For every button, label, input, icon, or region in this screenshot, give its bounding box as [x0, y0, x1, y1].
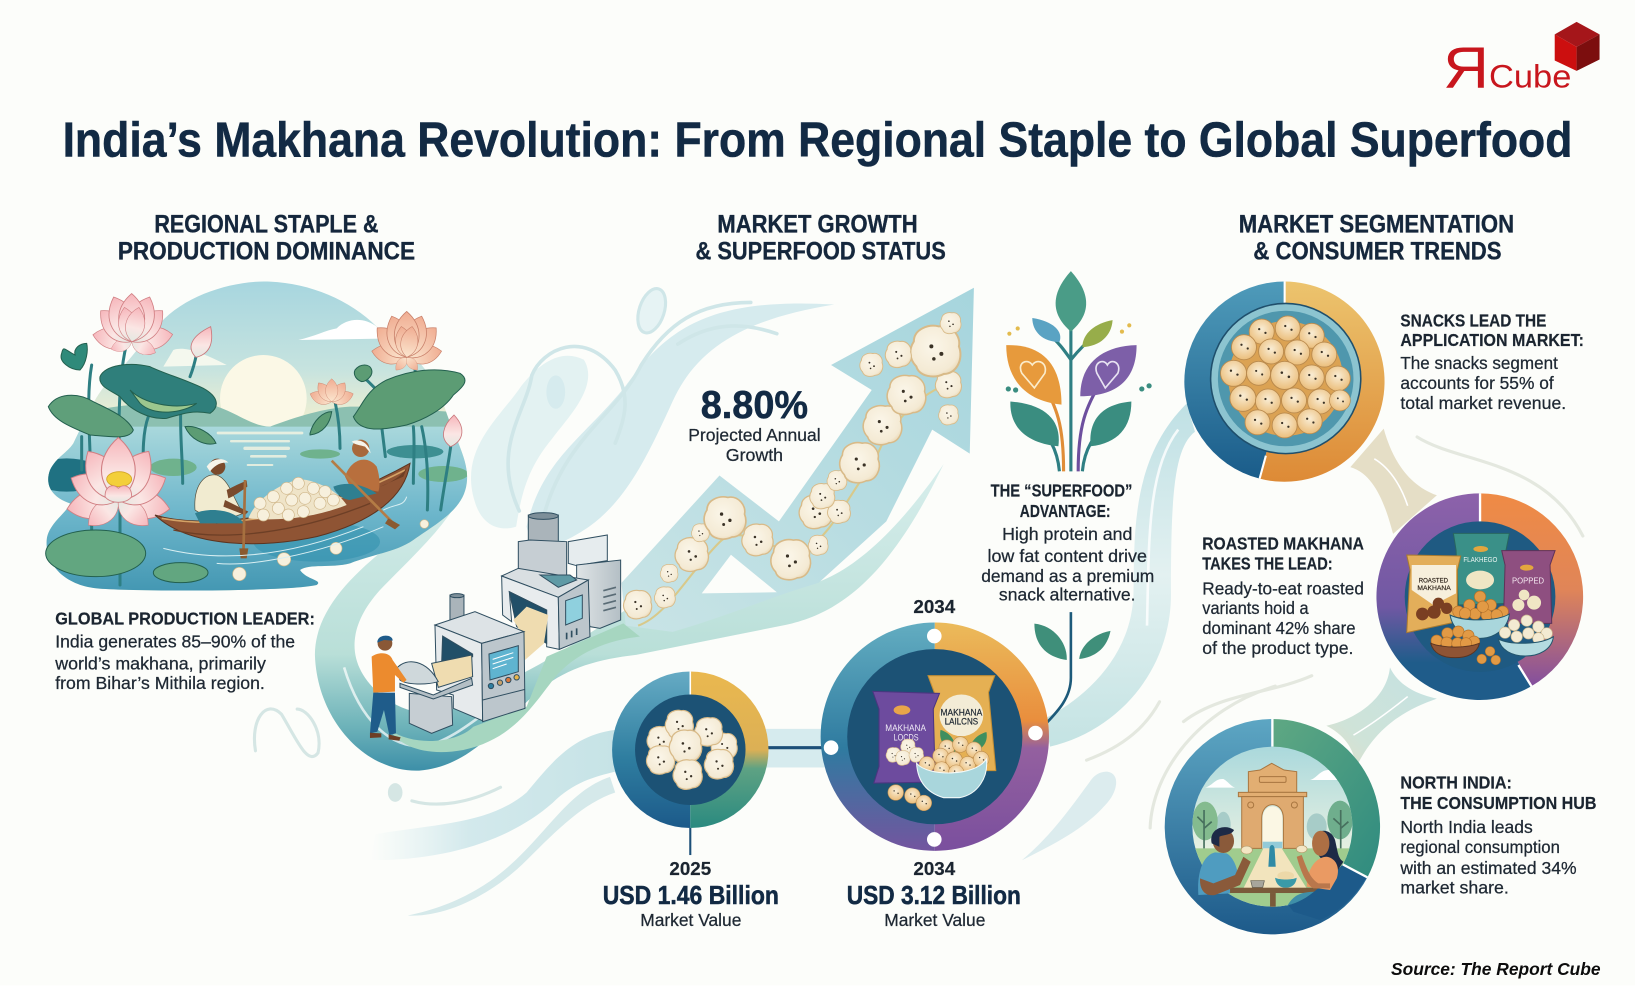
- scene: path and far figure: [1243, 848, 1307, 888]
- stat: 2034 value: USD 3.12 Billion: [847, 880, 1021, 910]
- text: roasted makhana: Ready-to-eat roasted: [1202, 578, 1364, 598]
- pack: roasted makhana yellow: ROASTED: [1419, 578, 1448, 585]
- bowl: middle orange makhana: [1450, 591, 1509, 638]
- lake: peach lotus: [369, 311, 444, 373]
- source note: Source: The Report Cube: [1391, 959, 1601, 979]
- stat: 2025 value: 2025: [669, 858, 711, 879]
- lake: floating seeds: [233, 520, 429, 581]
- text: roasted makhana: variants hoid a: [1202, 598, 1309, 618]
- stat: 2025 value: USD 1.46 Billion: [603, 880, 779, 910]
- stat: 2034 value: [847, 858, 1021, 930]
- heading: market growth: & SUPERFOOD STATUS: [696, 238, 946, 266]
- machine: rear box: [568, 535, 621, 628]
- text: global production leader: from Bihar’s Mithila region.: [55, 673, 265, 693]
- connector: 2025 to 2034: [690, 742, 834, 855]
- heading: market growth: [696, 211, 946, 266]
- text: superfood advantage: demand as a premium: [981, 566, 1154, 586]
- pack: popped purple: POPPED: [1512, 576, 1544, 585]
- pack: flakhego green: FLAKHEGO: [1463, 557, 1498, 564]
- circle: north india consumption: [1165, 719, 1380, 934]
- ribbon: right flow highlight: [1147, 430, 1178, 626]
- stat: 8.80% projected annual growth: Projected Annual: [688, 425, 821, 445]
- scene: trees: [1192, 801, 1353, 848]
- snacks bowl: puffs: [1221, 316, 1350, 438]
- ring 2034: bowl of makhana: [888, 737, 989, 811]
- lake: boat: [155, 463, 410, 544]
- illustration: processing machines and worker: [370, 513, 640, 752]
- text: roasted makhana: dominant 42% share: [1202, 618, 1356, 638]
- text: north india: regional consumption: [1400, 837, 1560, 857]
- circle: snacks bowl: [1184, 282, 1385, 482]
- lake: small lotus: [308, 379, 355, 407]
- heading: market segmentation: [1239, 211, 1514, 266]
- text: north india: with an estimated 34%: [1399, 858, 1577, 878]
- lake: pink lotus top left: [91, 292, 175, 359]
- heading: market growth: MARKET GROWTH: [717, 211, 918, 239]
- ring 2034: yellow pack: LAILCNS: [945, 717, 978, 727]
- heading: regional staple: [118, 211, 415, 266]
- ground under machines: [390, 623, 640, 752]
- scene: clouds: [1205, 770, 1345, 788]
- text: roasted makhana: ROASTED MAKHANA: [1202, 534, 1364, 554]
- ring 2034: yellow pack: MAKHANA: [941, 707, 982, 717]
- connector: teal lower: [1326, 667, 1437, 769]
- ribbon: lower flow: [370, 730, 615, 860]
- bowl: right white makhana: [1498, 615, 1553, 656]
- ring 2034: purple pack: [873, 691, 939, 783]
- logo: [1443, 22, 1600, 101]
- pack: popped purple: [1502, 551, 1555, 623]
- text: snacks lead: total market revenue.: [1400, 393, 1566, 413]
- logo: wordmark: [1443, 36, 1571, 101]
- crescent behind machines: [315, 464, 944, 771]
- ribbon: droplets: [633, 285, 671, 336]
- text: superfood advantage: snack alternative.: [999, 585, 1136, 605]
- ribbon: stream inside crescent: [344, 667, 490, 746]
- north india: scene: [1190, 745, 1357, 912]
- connector: beige highlight: [1374, 459, 1408, 506]
- lake: large front lotus: [65, 437, 172, 533]
- navy wedge over scene: [1288, 864, 1367, 920]
- text: north india: market share.: [1400, 878, 1509, 898]
- ring 2034: purple pack: LOCDS: [894, 732, 919, 742]
- woman: [1296, 831, 1343, 890]
- scene: table: [1229, 888, 1320, 893]
- connector: beige top: [1350, 429, 1437, 534]
- text: snacks lead: [1400, 310, 1584, 413]
- bowl: left brown makhana: [1431, 626, 1480, 658]
- lake: ripples: [163, 497, 407, 564]
- text: superfood advantage: THE “SUPERFOOD”: [991, 480, 1132, 500]
- logo: wordmark: Я: [1443, 36, 1489, 101]
- machine: furnace unit: [502, 513, 590, 649]
- heading: market segmentation: & CONSUMER TRENDS: [1253, 238, 1502, 266]
- text: north india: NORTH INDIA:: [1400, 772, 1512, 792]
- icon: sprout: [1034, 612, 1111, 733]
- worker: [370, 636, 407, 741]
- stat: 2034 value: Market Value: [884, 910, 986, 930]
- flowing ribbons: [254, 285, 1583, 916]
- chart ring: 2025 market value: [612, 672, 768, 828]
- heading: market segmentation: MARKET SEGMENTATION: [1239, 211, 1514, 239]
- text: global production leader: GLOBAL PRODUCTION LEADER:: [55, 609, 315, 629]
- ring 2034: nodes: [824, 629, 1043, 847]
- text: superfood advantage: [981, 480, 1154, 605]
- ribbon: upper swirl: [527, 303, 834, 545]
- lake: rower rear: [332, 440, 400, 529]
- stat: 2025 value: Market Value: [640, 910, 742, 930]
- man: [1198, 827, 1252, 895]
- text: superfood advantage: low fat content drive: [987, 546, 1147, 566]
- stat: 2025 value: [603, 858, 779, 930]
- text: snacks lead: APPLICATION MARKET:: [1400, 330, 1584, 350]
- circle: roasted makhana packs: [1376, 493, 1583, 700]
- logo: cube: [1555, 22, 1600, 71]
- machine: front unit: [397, 594, 525, 733]
- stat: 8.80% projected annual growth: 8.80%: [701, 384, 808, 427]
- white divider: [1343, 864, 1367, 877]
- scene: india gate: [1238, 763, 1307, 848]
- plant: hearts: [1020, 362, 1045, 388]
- stat: 8.80% projected annual growth: Growth: [726, 445, 783, 465]
- plant: leaves: [1056, 271, 1086, 332]
- arrow: makhana puffs: [624, 313, 961, 619]
- pack: roasted makhana yellow: MAKHANA: [1417, 585, 1451, 592]
- connector: teal highlight: [1353, 697, 1408, 735]
- pack: flakhego green: [1453, 533, 1510, 605]
- ring 2034: yellow pack: [928, 676, 996, 771]
- text: north india: North India leads: [1400, 817, 1533, 837]
- scene: table items: [1251, 881, 1264, 887]
- plant: sparkles: [1006, 383, 1152, 393]
- boat: makhana pile: [248, 480, 347, 519]
- ribbon: right flow: [1045, 404, 1195, 747]
- text: roasted makhana: of the product type.: [1202, 638, 1353, 658]
- illustration: lake scene with lotus and harvesters: [45, 282, 468, 590]
- machine: conveyor between units: [513, 607, 548, 660]
- text: global production leader: [54, 609, 315, 693]
- ribbon: left swirl: [471, 356, 588, 528]
- text: snacks lead: accounts for 55% of: [1400, 373, 1554, 393]
- arrow: vine: [638, 386, 944, 626]
- text: superfood advantage: ADVANTAGE:: [1020, 501, 1111, 521]
- snacks bowl: dish: [1211, 303, 1361, 454]
- ribbon: swirl outlines: [508, 302, 777, 521]
- text: snacks lead: SNACKS LEAD THE: [1400, 310, 1547, 330]
- label: 2034 above ring: 2034: [913, 596, 956, 617]
- pack: roasted makhana yellow: [1407, 555, 1461, 633]
- chart ring: 2034 market value: [821, 623, 1049, 851]
- text: superfood advantage: High protein and: [1002, 524, 1132, 544]
- text: north india: [1399, 772, 1596, 898]
- lake: buds: [191, 327, 462, 447]
- lake: lily pads and leaves: [46, 343, 465, 583]
- text: snacks lead: The snacks segment: [1400, 353, 1558, 373]
- ribbon: small curl strokes: [254, 709, 501, 804]
- text: roasted makhana: [1202, 534, 1364, 658]
- swirl strokes right: [1087, 437, 1583, 828]
- illustration: superfood plant icon: [1006, 271, 1152, 471]
- stat: 2034 value: 2034: [913, 858, 956, 879]
- lake: rower front: [195, 459, 248, 558]
- text: north india: THE CONSUMPTION HUB: [1400, 793, 1596, 813]
- text: global production leader: world’s makhana, primarily: [54, 653, 266, 673]
- arrow: cut-out triangle: [702, 555, 777, 593]
- plant: stems: [1032, 313, 1111, 471]
- heading: regional staple: PRODUCTION DOMINANCE: [118, 238, 415, 266]
- text: global production leader: India generates 85–90% of the: [55, 632, 295, 652]
- text: roasted makhana: TAKES THE LEAD:: [1202, 553, 1333, 573]
- ribbon: band between circles: [751, 729, 839, 767]
- loose puffs: [1477, 647, 1501, 665]
- lake: stems: [82, 343, 451, 585]
- growth arrow: [621, 288, 974, 632]
- logo: wordmark: Cube: [1489, 59, 1571, 95]
- stat: 8.80% projected annual growth: [688, 384, 821, 465]
- ribbon: dot: [388, 783, 402, 802]
- heading: regional staple: REGIONAL STAPLE &: [154, 211, 379, 239]
- ring 2025: makhana cluster: [646, 710, 737, 789]
- ribbon: lower sweep: [408, 777, 615, 916]
- ring 2034: purple pack: MAKHANA: [885, 723, 926, 733]
- droplet lower: [1022, 772, 1116, 860]
